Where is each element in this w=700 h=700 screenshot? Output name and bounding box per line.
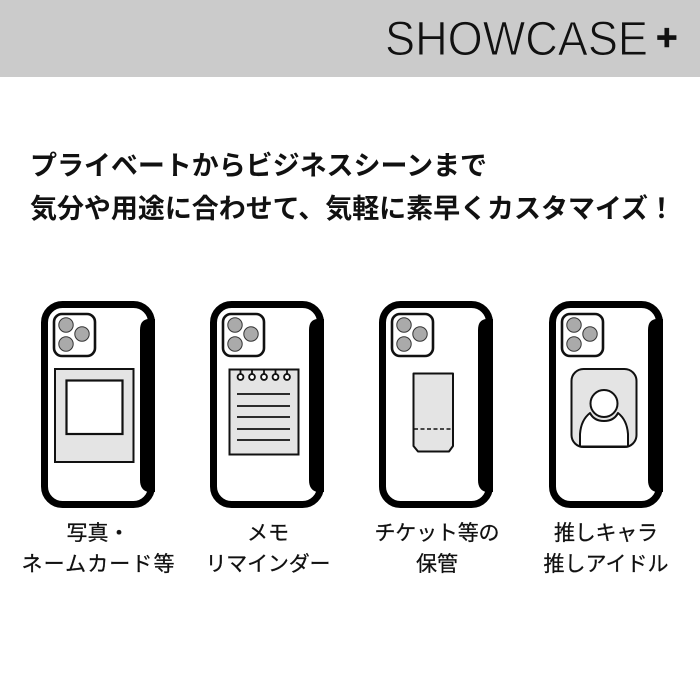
label: 推しキャラ	[554, 522, 658, 545]
header band	[0, 0, 700, 77]
headline text	[30, 151, 675, 224]
panel: ticket storage	[374, 304, 500, 576]
icon: phone case	[552, 304, 663, 504]
label: チケット等の	[374, 522, 500, 545]
label	[374, 522, 500, 576]
brand logo: SHOWCASE+: +	[656, 17, 678, 58]
headline text: 気分や用途に合わせて、気軽に素早くカスタマイズ！	[30, 193, 675, 224]
icon: memo pad	[230, 369, 298, 454]
panel: favorite character and idol	[544, 304, 668, 576]
label	[22, 522, 174, 576]
icon: ticket	[414, 374, 453, 452]
label: 推しアイドル	[544, 553, 668, 576]
label: 写真・	[66, 522, 130, 545]
icon: phone case	[44, 304, 155, 504]
brand logo: SHOWCASE+: SHOWCASE	[385, 13, 648, 66]
icon: person photo card	[572, 369, 636, 447]
label	[544, 522, 668, 576]
panel: photo and name card case	[22, 304, 174, 576]
icon: phone case	[214, 304, 324, 504]
icon: photo card	[55, 369, 134, 462]
label: ネームカード等	[22, 553, 174, 576]
label: リマインダー	[206, 553, 330, 576]
label	[206, 522, 330, 576]
label: 保管	[416, 553, 458, 576]
icon: phone case	[382, 304, 493, 504]
label: メモ	[247, 522, 289, 545]
headline text: プライベートからビジネスシーンまで	[30, 151, 487, 181]
panel: memo and reminder	[206, 304, 330, 576]
